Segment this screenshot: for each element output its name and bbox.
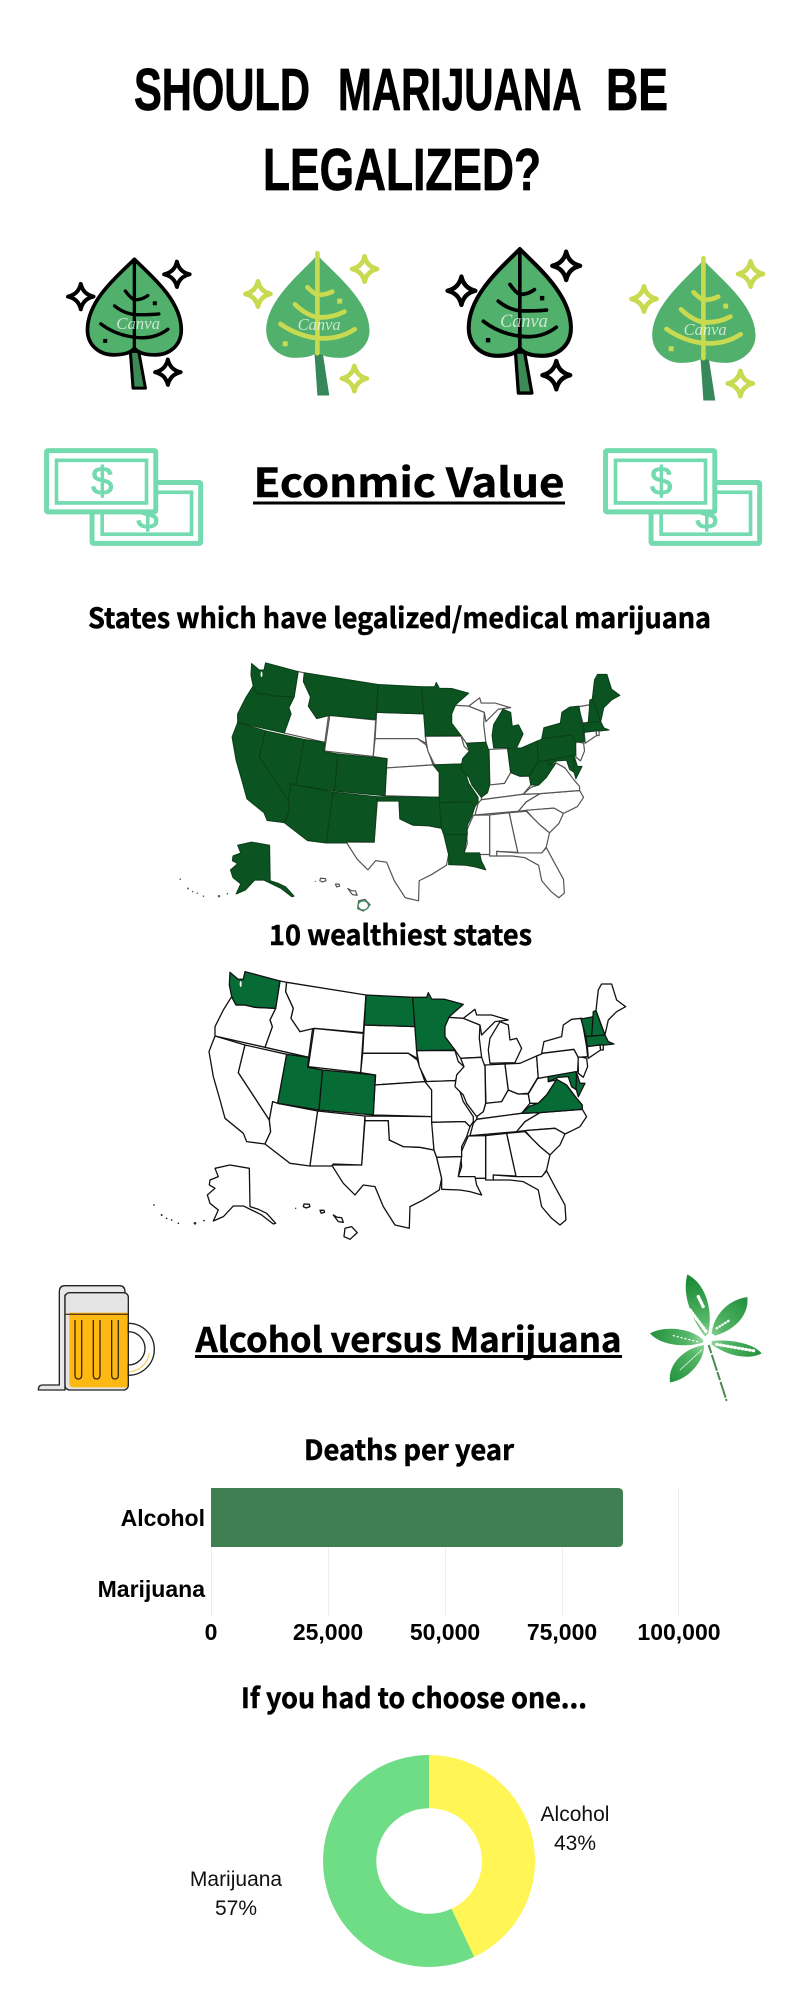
heading: 10 wealthiest states: 10 wealthiest states <box>269 914 532 954</box>
bar chart: deaths per year: 75,000 <box>527 1619 597 1645</box>
icon: cannabis leaf <box>650 1274 762 1401</box>
icon: dollar bills left <box>47 451 201 543</box>
bar chart: deaths per year: Marijuana <box>98 1576 205 1602</box>
icon: black outlined leaf 1 <box>68 259 190 388</box>
bar chart: deaths per year: 0 <box>205 1619 217 1645</box>
icon: flat green leaf 4 <box>631 258 763 401</box>
label: marijuana: Marijuana <box>190 1868 282 1891</box>
heading: If you had to choose one: If you had to choose one... <box>241 1677 587 1717</box>
bar chart: deaths per year: Alcohol <box>121 1505 205 1531</box>
segment: alcohol 43% <box>429 1755 535 1957</box>
icon: flat green leaf 2 <box>245 253 377 396</box>
title: LEGALIZED? <box>263 137 541 203</box>
label: marijuana: 57% <box>215 1897 257 1920</box>
map: states with legalized or medical marijuana <box>179 663 620 911</box>
map: 10 wealthiest states <box>153 972 626 1239</box>
title: SHOULD <box>134 57 310 123</box>
title <box>134 57 668 203</box>
bar chart: deaths per year: 25,000 <box>293 1619 363 1645</box>
bar chart: deaths per year: 100,000 <box>637 1619 721 1645</box>
label: alcohol: 43% <box>554 1832 596 1855</box>
heading: states legalized: States which have legalized/medical marijuana <box>88 597 711 637</box>
bar chart: deaths per year: 50,000 <box>410 1619 480 1645</box>
icon: black outlined leaf 3 <box>448 249 580 393</box>
donut chart <box>190 1755 609 1967</box>
segment: marijuana 57% <box>323 1755 474 1967</box>
bar: alcohol <box>211 1488 623 1547</box>
icon: beer mug <box>38 1286 154 1390</box>
heading: Deaths per year: Deaths per year <box>304 1429 515 1469</box>
title: BE <box>606 57 668 123</box>
bar chart: deaths per year <box>98 1488 721 1645</box>
label: alcohol: Alcohol <box>541 1803 609 1826</box>
heading: Alcohol versus Marijuana: Alcohol versus Marijuana <box>194 1313 622 1362</box>
icon: dollar bills right <box>606 451 760 543</box>
title: MARIJUANA <box>338 57 581 123</box>
heading: Econmic Value: Econmic Value <box>254 451 564 509</box>
